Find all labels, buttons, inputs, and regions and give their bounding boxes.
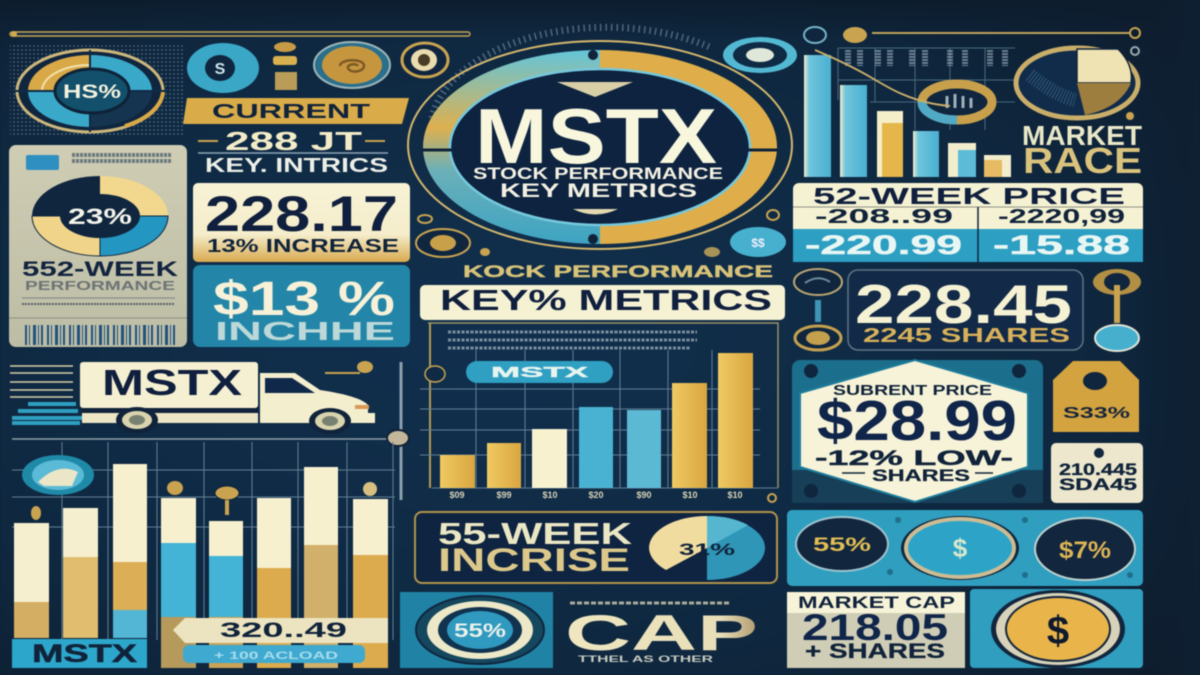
chart tag (466, 361, 613, 383)
title: MSTX (475, 92, 717, 180)
value pill: 320..49 (220, 619, 347, 642)
panel: top-left percentage dial (10, 45, 185, 137)
icon: teal dollar coin (187, 43, 259, 93)
chart axis labels: $20 (588, 490, 604, 500)
dial value: HS% (63, 82, 121, 103)
icon: gold lower-left medallion (416, 229, 470, 257)
chart label MSTX: MSTX (32, 640, 137, 668)
icon: teal upper-right medallion (723, 37, 797, 73)
chart label MSTX (12, 639, 147, 668)
panel: cap: TTHEL AS OTHER (578, 654, 714, 664)
panel: current price badge: SUBRENT PRICE (833, 382, 992, 399)
panel: market cap: MARKET CAP (798, 593, 955, 612)
card donut: 23% (68, 204, 132, 229)
icon: cream price tag: 210.445 (1059, 460, 1137, 479)
pie (649, 516, 765, 580)
text block: market race: MARKET (1022, 120, 1142, 151)
panel: market cap: + SHARES (805, 640, 945, 663)
icon: teal lower-right medallion (730, 227, 786, 257)
pie: 31% (679, 540, 735, 559)
icon: key and pins (31, 481, 377, 520)
panel: 228.17 value (193, 183, 410, 262)
button: 55%: 55% (813, 535, 871, 556)
panel: 13% teal: $13 % (213, 273, 395, 326)
icon: gold price tag (1053, 361, 1139, 432)
pie: market (1016, 47, 1139, 120)
speed lines (10, 366, 73, 397)
panel: gold dollar coin: $ (1047, 609, 1069, 653)
panel: gold dollar coin (970, 589, 1143, 668)
icons: right of shares (1093, 269, 1141, 351)
wheels (116, 407, 158, 433)
table: 52-week price: -220.99 (805, 230, 962, 260)
bar chart: central growth (420, 323, 778, 502)
icon: ring medallion (402, 43, 448, 77)
button: centre dollar (901, 516, 1019, 580)
trend line (815, 50, 950, 106)
button: $% (1035, 518, 1135, 580)
panel: 55-week increase: 55-WEEK (438, 516, 633, 551)
gauge ring: 55% (454, 621, 506, 642)
chart axis labels: $10 (542, 490, 558, 500)
icon: teal lower-right medallion: $$ (751, 236, 765, 250)
panel: 228.17 value: 228.17 (205, 186, 398, 242)
gauge ring (416, 596, 544, 664)
panel: 228.45 shares (848, 270, 1083, 350)
icon: location pin and vertical post (12, 361, 409, 500)
button: centre dollar: $ (953, 533, 968, 563)
panel: 52-week card (9, 145, 187, 347)
chart axis labels: $10 (727, 490, 743, 500)
title emblem (408, 27, 792, 249)
top rule (10, 31, 470, 37)
icon: teal dollar coin: S (215, 61, 226, 78)
icon: top-right coins and rule (804, 27, 1140, 43)
heading: kock performance: KOCK PERFORMANCE (463, 262, 773, 281)
teal caption pill (183, 645, 365, 663)
table: 52-week price: 52-WEEK PRICE (813, 183, 1125, 209)
icon: gold price tag: S33% (1063, 405, 1130, 422)
icon: gold spiral coin (314, 42, 390, 88)
panel: 228.45 shares: 228.45 (855, 273, 1072, 335)
table: 52-week price: -15.88 (993, 230, 1130, 260)
text block: 288 value: 288 JT (225, 126, 362, 156)
text block: 288 value: KEY. INTRICS (205, 155, 388, 177)
icon: small gold dots (418, 210, 779, 257)
icons: left of shares (794, 269, 842, 350)
icon: cream price tag: SDA45 (1059, 475, 1137, 494)
bar chart: lower-left stacked (12, 442, 395, 668)
banner: current (183, 98, 409, 124)
icon: truck (10, 362, 375, 434)
bar chart: top-right falling bars (804, 48, 1015, 177)
panel: cap: CAP (565, 605, 758, 661)
tag (26, 155, 59, 170)
icon: small gold stack (273, 42, 297, 90)
table: 52-week price: -2220,99 (998, 206, 1125, 228)
panel: cap (400, 592, 758, 668)
icon: pin (425, 366, 776, 502)
cab (260, 373, 375, 423)
panel: 55-week increase (415, 512, 777, 583)
barcode (25, 325, 175, 345)
panel: 228.45 shares: 2245 SHARES (863, 325, 1070, 347)
panel: current price badge: SHARES (872, 466, 970, 485)
panel: 55-week increase: INCRISE (438, 542, 630, 578)
panel: 228.17 value: 13% INCREASE (207, 236, 399, 256)
chart axis labels: $10 (682, 490, 698, 500)
value pill (173, 618, 388, 643)
chart axis labels: $90 (636, 490, 652, 500)
card heading: 552-WEEK (22, 258, 178, 281)
banner: current: CURRENT (212, 101, 370, 123)
panel: 13% teal: INCHHE (215, 316, 395, 346)
icon: cream price tag (1051, 443, 1143, 503)
card donut (32, 176, 168, 256)
panel: teal buttons (787, 510, 1143, 586)
text block: 288 value (198, 126, 388, 177)
button: 55% (796, 517, 888, 571)
panel: 13% teal (193, 265, 410, 347)
subtitle line 1: STOCK PERFORMANCE (473, 164, 723, 183)
panel: 52-week card: PERFORMANCE (25, 278, 175, 293)
text block: market race (1022, 120, 1142, 181)
chart tag: MSTX (491, 364, 588, 381)
icon: chart badge (22, 455, 94, 495)
table: 52-week price: -208..99 (815, 206, 953, 228)
subtitle line 2: KEY METRICS (500, 181, 697, 202)
panel: market cap (787, 592, 965, 668)
donut on chart (922, 84, 992, 120)
chart axis labels: $99 (496, 490, 512, 500)
chart axis labels (449, 490, 743, 500)
text block: market race: RACE (1023, 140, 1142, 181)
cargo body (80, 362, 258, 408)
truck label: MSTX (102, 362, 242, 403)
heading: key metrics banner: KEY% METRICS (440, 285, 772, 317)
panel: current price badge: -12% LOW- (815, 447, 1013, 470)
panel: current price badge (792, 360, 1043, 503)
panel: current price badge: $28.99 (817, 389, 1017, 453)
table: 52-week price (793, 183, 1143, 262)
panel: market cap: 218.05 (802, 607, 948, 648)
button: $%: $7% (1059, 537, 1111, 564)
heading: key metrics banner (420, 285, 785, 320)
rivets (887, 517, 1133, 578)
chart axis labels: $09 (449, 490, 465, 500)
teal caption pill: + 100 ACLOAD (214, 650, 338, 662)
